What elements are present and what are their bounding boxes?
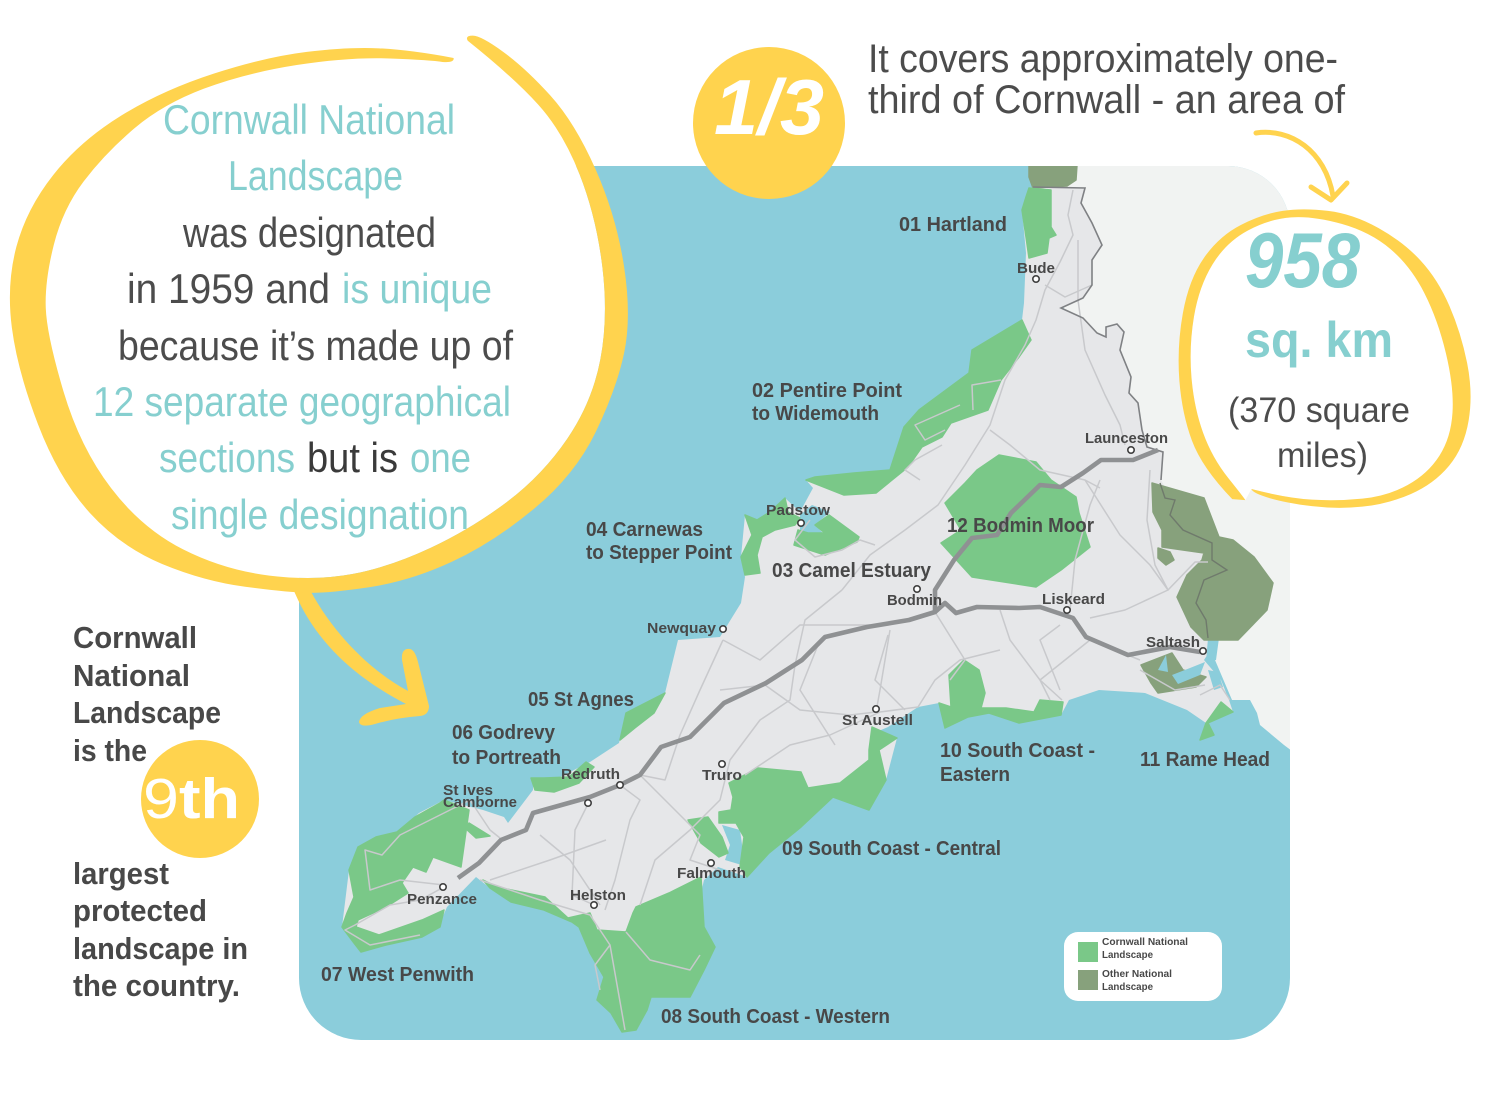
cornwall national landscape areas <box>342 188 1233 1032</box>
callout: area figure: miles) <box>1277 436 1368 475</box>
side text: ninth largest: Cornwall <box>73 620 197 655</box>
bubble text: is unique <box>342 265 492 312</box>
bubble text <box>93 96 513 538</box>
section labels: 04 Carnewas <box>586 519 703 541</box>
legend: Other National <box>1102 969 1172 980</box>
callout: area figure: (370 square <box>1228 391 1410 430</box>
section labels <box>321 214 1270 1028</box>
town labels: St Austell <box>842 712 913 729</box>
bubble text: Cornwall National <box>163 96 455 143</box>
saltash creeks <box>1158 655 1205 684</box>
town labels: St Ives <box>443 782 493 799</box>
county border <box>1033 187 1163 480</box>
town labels: Newquay <box>647 620 717 637</box>
town labels: Falmouth <box>677 865 746 882</box>
section labels: Eastern <box>940 764 1010 786</box>
side text: ninth largest: landscape in <box>73 931 248 966</box>
town labels: Bude <box>1017 260 1055 277</box>
arrow: bubble pointer <box>292 586 429 726</box>
legend: Landscape <box>1102 950 1153 961</box>
side text: ninth largest: the country. <box>73 968 240 1003</box>
section labels: 03 Camel Estuary <box>772 560 932 582</box>
bubble text: sections <box>159 434 295 481</box>
bubble text: one <box>410 434 471 481</box>
bubble text: because it’s made up of <box>118 322 513 369</box>
bubble text: but is <box>307 434 398 481</box>
bubble text: 12 separate geographical <box>93 378 511 425</box>
section labels: 08 South Coast - Western <box>661 1006 890 1028</box>
callout: left speech bubble <box>10 36 628 726</box>
section labels: 01 Hartland <box>899 214 1007 236</box>
side text: ninth largest: largest <box>73 856 169 891</box>
section labels: to Portreath <box>452 747 561 769</box>
callout: area figure: 958 <box>1245 216 1361 304</box>
bubble text: single designation <box>171 491 469 538</box>
town labels: Launceston <box>1085 430 1168 447</box>
section labels: 06 Godrevy <box>452 722 556 744</box>
section labels: 07 West Penwith <box>321 964 474 986</box>
callout: area figure <box>1179 209 1471 508</box>
side text: ninth largest <box>73 620 248 1003</box>
callout: area figure: sq. km <box>1245 312 1393 368</box>
intro text: area covered <box>868 37 1346 122</box>
town labels: Helston <box>570 887 626 904</box>
arrow: to area figure <box>1256 132 1347 200</box>
town labels: Bodmin <box>887 592 942 609</box>
badge: 9th <box>141 740 259 858</box>
intro text: area covered: It covers approximately one- <box>868 37 1338 81</box>
section labels: 09 South Coast - Central <box>782 838 1001 860</box>
badge: one third <box>693 47 845 199</box>
bubble text: Landscape <box>228 152 403 199</box>
town labels: Liskeard <box>1042 591 1105 608</box>
section labels: 12 Bodmin Moor <box>947 515 1094 537</box>
map panel <box>299 165 1300 1040</box>
section labels: 10 South Coast - <box>940 740 1095 762</box>
section labels: to Widemouth <box>752 403 879 425</box>
section labels: 05 St Agnes <box>528 689 634 711</box>
town labels: Penzance <box>407 891 477 908</box>
town markers <box>440 276 1206 908</box>
secondary roads <box>345 190 1230 1030</box>
estuary water <box>722 505 1223 866</box>
side text: ninth largest: National <box>73 658 190 693</box>
section labels: 02 Pentire Point <box>752 380 902 402</box>
main roads <box>458 450 1200 878</box>
town labels: Camborne <box>443 794 517 811</box>
river tamar <box>1160 483 1227 638</box>
section labels: to Stepper Point <box>586 542 732 564</box>
side text: ninth largest: is the <box>73 733 147 768</box>
town labels: Saltash <box>1146 634 1200 651</box>
town labels: Redruth <box>561 766 620 783</box>
legend: Landscape <box>1102 982 1153 993</box>
badge: 9th: 9th <box>143 767 240 831</box>
bubble text: was designated <box>182 209 436 256</box>
bubble text: in 1959 and <box>127 265 330 312</box>
intro text: area covered: third of Cornwall - an area of <box>868 78 1346 122</box>
badge: one third: 1/3 <box>714 63 824 151</box>
legend: Cornwall National <box>1102 937 1188 948</box>
section labels: 11 Rame Head <box>1140 749 1270 771</box>
legend <box>1064 932 1222 1001</box>
side text: ninth largest: protected <box>73 893 207 928</box>
town labels: Padstow <box>766 502 830 519</box>
town labels <box>407 260 1200 908</box>
other national landscape areas <box>1029 165 1273 693</box>
side text: ninth largest: Landscape <box>73 695 221 730</box>
town labels: Truro <box>702 767 742 784</box>
